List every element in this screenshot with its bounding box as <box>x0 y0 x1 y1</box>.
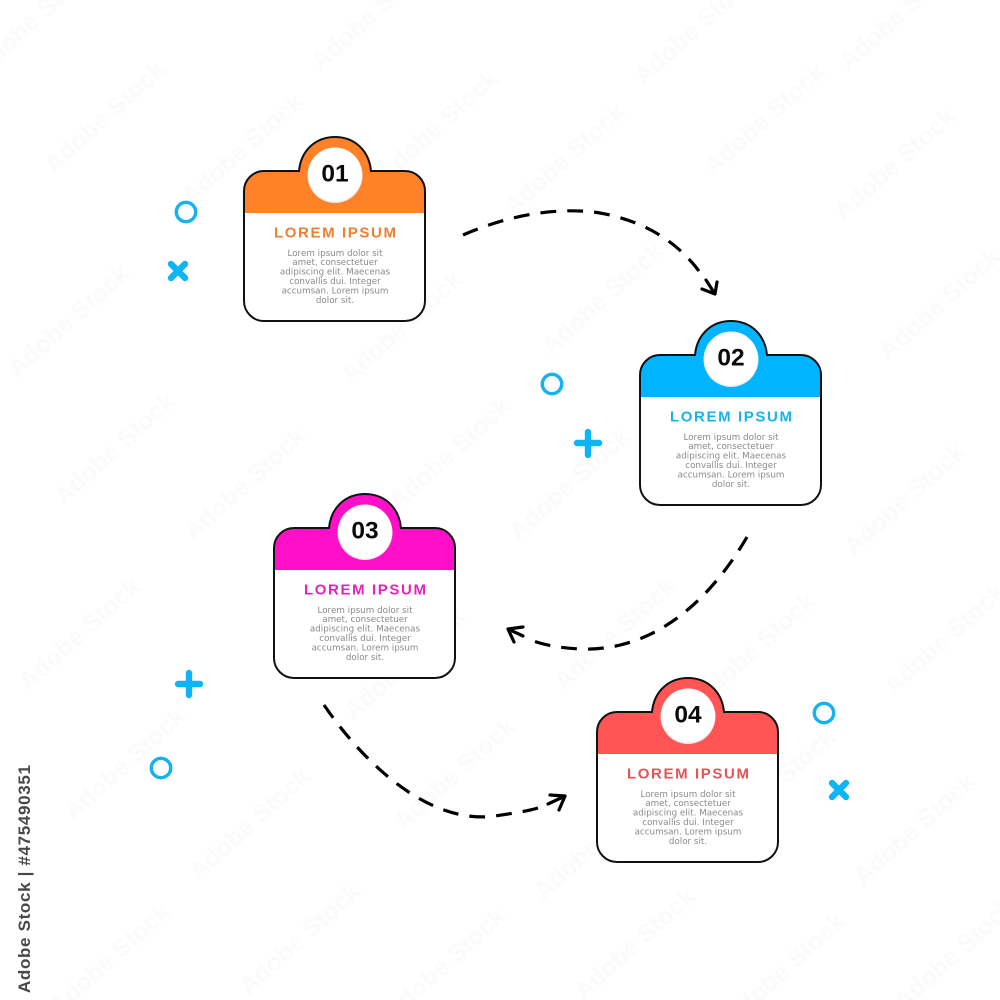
card 02 body text: accumsan. Lorem ipsum <box>678 470 784 480</box>
background watermark pattern: Adobe Stock <box>3 259 135 383</box>
card 01 body text: convallis dui. Integer <box>289 277 381 287</box>
background watermark pattern: Adobe Stock <box>689 587 821 711</box>
card 01 body text: accumsan. Lorem ipsum <box>282 286 388 296</box>
card 01 outline <box>244 137 425 321</box>
card 04 body text: convallis dui. Integer <box>642 818 734 828</box>
side stock label: Adobe Stock | #475490351 <box>15 765 34 993</box>
card 01 body text: dolor sit. <box>316 296 354 306</box>
card 01 number badge <box>308 148 362 203</box>
card 03 body text: Lorem ipsum dolor sit <box>317 606 413 616</box>
arrow: step 1 to step 2 <box>463 211 717 294</box>
background watermark pattern: Adobe Stock <box>336 265 468 389</box>
icon: circle near card 01 <box>176 202 196 222</box>
card 02 header band <box>640 321 821 397</box>
card 03 white body <box>274 494 455 678</box>
card 01 number: 01 <box>321 161 349 188</box>
background watermark pattern: Adobe Stock <box>177 87 309 211</box>
background watermark pattern: Adobe Stock <box>709 722 841 846</box>
icon: cross near card 04 <box>832 783 846 797</box>
background watermark pattern: Adobe Stock <box>849 767 981 891</box>
card 03 body text: convallis dui. Integer <box>319 634 411 644</box>
card 03 body text: adipiscing elit. Maecenas <box>310 625 421 635</box>
card 03 body text: accumsan. Lorem ipsum <box>312 643 418 653</box>
card 01 <box>244 137 425 321</box>
background watermark pattern: Adobe Stock <box>549 572 681 696</box>
arrow: step 3 to step 4 <box>324 705 565 817</box>
card 02 body text: convallis dui. Integer <box>685 461 777 471</box>
card 04 body text: adipiscing elit. Maecenas <box>633 809 744 819</box>
background watermark pattern: Adobe Stock <box>59 702 191 826</box>
background watermark pattern: Adobe Stock <box>184 762 316 886</box>
background watermark pattern: Adobe Stock <box>699 57 831 181</box>
card 04 outline <box>597 678 778 862</box>
card 02 body text: adipiscing elit. Maecenas <box>676 452 787 462</box>
card 01 white body <box>244 137 425 321</box>
background watermark pattern: Adobe Stock <box>39 55 171 179</box>
background watermark pattern: Adobe Stock <box>389 712 521 836</box>
background watermark pattern: Adobe Stock <box>234 877 366 1000</box>
card 01 body text: amet, consectetuer <box>292 258 378 268</box>
card 03 header band <box>274 494 455 570</box>
background watermark pattern: Adobe Stock <box>537 237 669 361</box>
background watermark pattern: Adobe Stock <box>49 387 181 511</box>
background watermark pattern: Adobe Stock <box>499 97 631 221</box>
card 04 body text: accumsan. Lorem ipsum <box>635 827 741 837</box>
background watermark pattern: Adobe Stock <box>179 422 311 546</box>
icon: plus near card 03 <box>178 673 200 695</box>
card 02 body text: Lorem ipsum dolor sit <box>683 433 779 443</box>
card 03 heading: LOREM IPSUM <box>304 582 426 598</box>
icon: cross near card 01 <box>171 264 185 278</box>
card 02 number badge <box>704 332 758 387</box>
icon: circle near card 03 <box>151 758 171 778</box>
card 02 outline <box>640 321 821 505</box>
card 03 number badge <box>338 504 392 560</box>
background watermark pattern: Adobe Stock <box>504 422 636 546</box>
icon: plus near card 02 <box>577 432 599 455</box>
card 04 number: 04 <box>674 702 702 729</box>
card 03 body text: amet, consectetuer <box>322 615 408 625</box>
card 03 body text: dolor sit. <box>346 653 384 663</box>
card 04 number badge <box>660 688 716 744</box>
card 03 <box>274 494 455 678</box>
card 02 number: 02 <box>717 345 745 372</box>
card 04 white body <box>597 678 778 862</box>
icon: circle near card 02 <box>542 374 562 394</box>
card 04 body text: dolor sit. <box>669 837 707 847</box>
card 04 body text: amet, consectetuer <box>645 799 731 809</box>
card 04 body text: Lorem ipsum dolor sit <box>640 790 736 800</box>
background watermark pattern: Adobe Stock <box>339 602 471 726</box>
card 03 outline <box>274 494 455 678</box>
card 02 heading: LOREM IPSUM <box>670 408 792 426</box>
card 04 heading: LOREM IPSUM <box>627 766 749 782</box>
background watermark pattern: Adobe Stock <box>829 102 961 226</box>
card 02 <box>640 321 821 505</box>
background watermark pattern: Adobe Stock <box>384 392 516 516</box>
icon: circle near card 04 <box>814 703 834 723</box>
background watermark pattern: Adobe Stock <box>372 64 504 188</box>
card 01 heading: LOREM IPSUM <box>274 224 396 242</box>
card 02 body text: amet, consectetuer <box>688 442 774 452</box>
card 02 body text: dolor sit. <box>712 480 750 490</box>
card 01 body text: Lorem ipsum dolor sit <box>287 249 383 259</box>
card 03 number: 03 <box>351 518 379 545</box>
background watermark pattern: Adobe Stock <box>839 437 971 561</box>
card 01 body text: adipiscing elit. Maecenas <box>280 268 391 278</box>
background watermark pattern: Adobe Stock <box>14 572 146 696</box>
card 04 <box>597 678 778 862</box>
arrow: step 2 to step 3 <box>508 537 747 649</box>
card 02 white body <box>640 321 821 505</box>
background watermark pattern: Adobe Stock <box>529 782 661 906</box>
card 01 header band <box>244 137 425 213</box>
card 04 header band <box>597 678 778 754</box>
